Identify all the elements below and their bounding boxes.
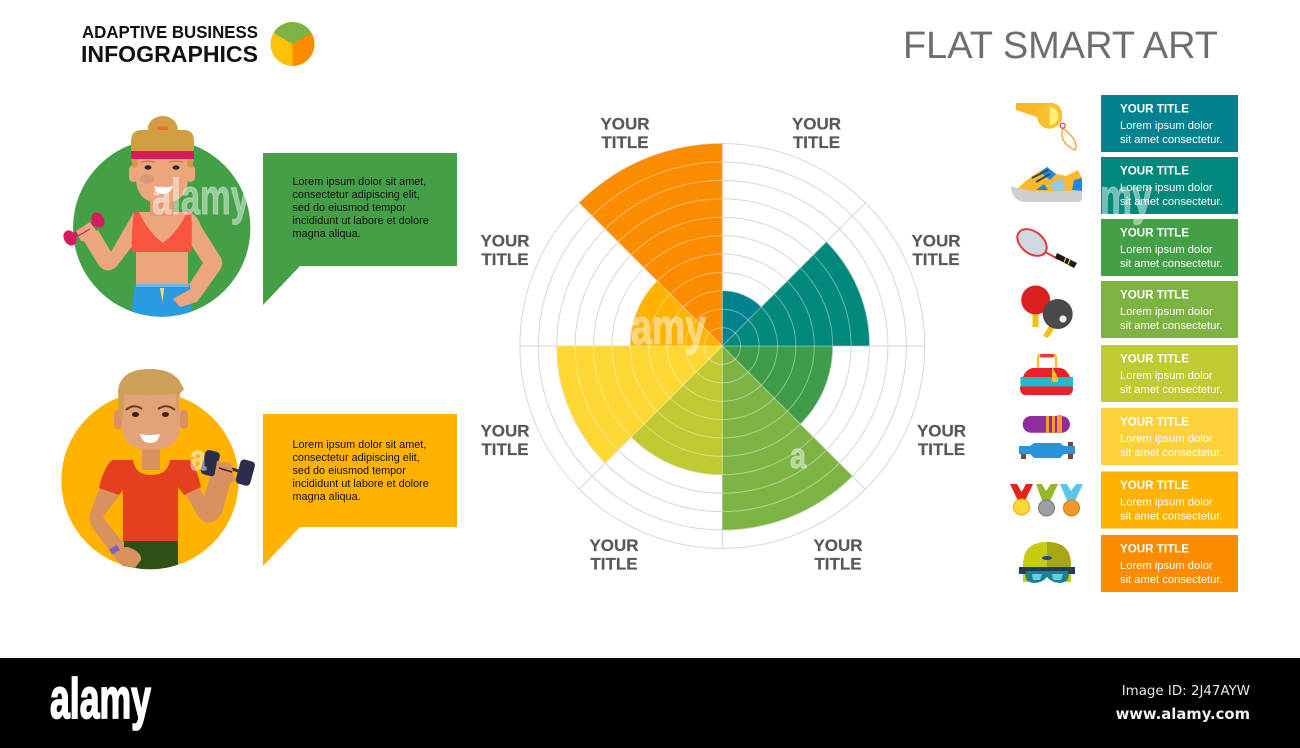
watermark fragments: alamy (152, 169, 250, 225)
icon: table tennis paddles (1021, 286, 1073, 338)
list item 6 (1101, 408, 1238, 465)
list item 7: sit amet consectetur. (1120, 510, 1223, 522)
character: woman with dumbbell (61, 116, 250, 320)
callout: amber speech box (263, 414, 457, 566)
list item 5: YOUR TITLE (1120, 352, 1189, 366)
list item 5 (1101, 345, 1238, 402)
list item 1: Lorem ipsum dolor (1120, 120, 1213, 132)
callout: green speech box: Lorem ipsum dolor sit amet, (292, 176, 426, 188)
list item 8: sit amet consectetur. (1120, 574, 1223, 586)
callout: amber speech box: incididunt ut labore et dolore (292, 478, 429, 490)
callout: green speech box: consectetur adipiscing elit, (292, 189, 420, 201)
chart labels: YOUR (792, 114, 841, 134)
icon: skateboards (1019, 415, 1075, 459)
watermark fragments (152, 169, 1152, 478)
chart labels: YOUR (589, 536, 639, 555)
watermark fragments: amy (631, 299, 706, 355)
list item 2: Lorem ipsum dolor (1120, 182, 1213, 194)
chart labels: TITLE (793, 133, 840, 152)
chart labels: YOUR (480, 232, 530, 250)
list item 8: YOUR TITLE (1120, 542, 1189, 556)
list item 2: YOUR TITLE (1120, 164, 1189, 178)
list item 4: Lorem ipsum dolor (1120, 306, 1213, 318)
callout: green speech box: incididunt ut labore et dolore (292, 215, 429, 227)
list item 4: YOUR TITLE (1120, 288, 1189, 302)
list item 6: sit amet consectetur. (1120, 447, 1223, 459)
watermark fragments: my (1100, 169, 1152, 225)
list item 3 (1101, 219, 1238, 276)
footer bar (0, 658, 1300, 748)
icon: running shoe (1011, 167, 1082, 202)
icon: medals (1010, 484, 1083, 516)
watermark fragments: a (190, 437, 207, 478)
list item 8: Lorem ipsum dolor (1120, 560, 1213, 572)
chart labels: YOUR (480, 422, 530, 440)
chart labels: TITLE (814, 554, 862, 574)
list item 7: YOUR TITLE (1120, 478, 1189, 492)
character: man with dumbbell (61, 369, 256, 575)
callout: amber speech box: consectetur adipiscing elit, (292, 452, 420, 464)
list item 3: YOUR TITLE (1120, 226, 1189, 240)
list item 5: Lorem ipsum dolor (1120, 370, 1213, 382)
watermark fragments: a (790, 435, 807, 476)
chart labels: TITLE (918, 440, 965, 459)
icon: whistle (1016, 103, 1076, 150)
chart labels: YOUR (600, 114, 650, 134)
chart labels: TITLE (481, 250, 529, 269)
footer logo: alamy (50, 667, 151, 731)
list item 3: Lorem ipsum dolor (1120, 244, 1213, 256)
list item 3: sit amet consectetur. (1120, 258, 1223, 270)
logo: adaptive business infographics: INFOGRAPHICS (81, 41, 258, 67)
chart labels: YOUR (813, 536, 863, 555)
polar area chart (520, 144, 925, 548)
chart labels: TITLE (601, 133, 649, 152)
callout: green speech box: magna aliqua. (292, 228, 361, 240)
chart labels (480, 114, 966, 574)
list item 5: sit amet consectetur. (1120, 384, 1223, 396)
chart labels: YOUR (911, 232, 961, 250)
chart labels: YOUR (917, 422, 966, 440)
logo: adaptive business infographics (81, 22, 314, 67)
list item 2 (1101, 157, 1238, 214)
list item 4: sit amet consectetur. (1120, 320, 1223, 332)
list item 8 (1101, 535, 1238, 592)
list item 7 (1101, 472, 1238, 528)
callout: amber speech box: magna aliqua. (292, 491, 361, 503)
callout: green speech box: sed do eiusmod tempor (292, 202, 406, 214)
list item 6: Lorem ipsum dolor (1120, 433, 1213, 445)
icon: helmet and goggles (1019, 542, 1075, 583)
callout: green speech box (263, 153, 457, 305)
list item 1 (1101, 95, 1238, 152)
list item 4 (1101, 281, 1238, 338)
title: flat smart art: FLAT SMART ART (903, 25, 1218, 67)
list item 2: sit amet consectetur. (1120, 196, 1223, 208)
website: www.alamy.com (1116, 706, 1250, 723)
list item 6: YOUR TITLE (1120, 414, 1189, 428)
image id: Image ID: 2J47AYW (1122, 684, 1250, 699)
chart labels: TITLE (590, 554, 638, 574)
callout: amber speech box: Lorem ipsum dolor sit amet, (292, 439, 426, 451)
list item 1: sit amet consectetur. (1120, 134, 1223, 146)
logo: adaptive business infographics: ADAPTIVE BUSINESS (82, 22, 258, 42)
chart labels: TITLE (481, 440, 529, 459)
callout: amber speech box: sed do eiusmod tempor (292, 465, 406, 477)
list item 7: Lorem ipsum dolor (1120, 496, 1213, 508)
list item 1: YOUR TITLE (1120, 102, 1189, 116)
chart labels: TITLE (912, 250, 960, 269)
icon: sports bag (1020, 354, 1073, 395)
icon: tennis racket (1012, 224, 1077, 268)
